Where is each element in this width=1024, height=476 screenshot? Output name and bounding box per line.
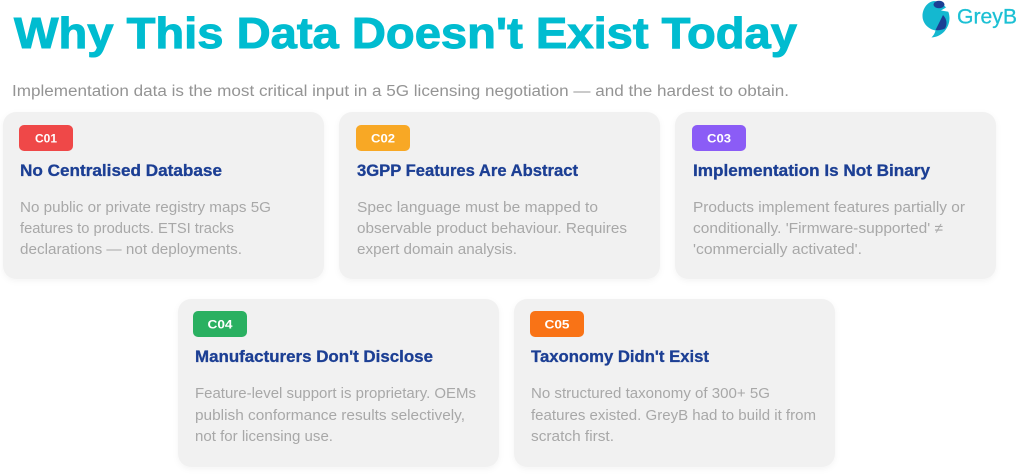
text: C02: Spec language must be mapped to [357,200,598,216]
text: C05: No structured taxonomy of 300+ 5G [531,386,770,402]
badge: C04 [193,311,247,337]
heading: C03: Implementation Is Not Binary [693,162,931,180]
icon: GreyB mark [922,1,950,37]
wordmark: GreyB [957,6,1017,28]
text: C05: scratch first. [531,429,614,445]
text: C01: features to products. ETSI tracks [20,221,234,237]
badge: C02 [356,125,410,151]
text: C03 [693,200,965,258]
text: C04 [195,386,476,445]
badge: C05 [530,311,584,337]
panel: C05 [514,299,835,467]
text: C05 [531,386,816,445]
heading: C05: Taxonomy Didn't Exist [531,348,709,366]
text: C01: No public or private registry maps 5G [20,200,271,216]
text: C04: Feature-level support is proprietary. OEMs [195,386,476,402]
badge: C05: C05 [544,318,570,332]
logo: GreyB [922,1,1017,37]
panel: C04 [178,299,499,467]
title: Why This Data Doesn't Exist Today [14,10,797,58]
panel: C03 [675,112,996,279]
text: C04: publish conformance results selectively, [195,408,465,424]
heading: C04: Manufacturers Don't Disclose [195,348,433,366]
text: C02 [357,200,627,258]
text: C03: Products implement features partially or [693,200,965,216]
text: C04: not for licensing use. [195,429,333,445]
heading: C02: 3GPP Features Are Abstract [357,162,579,180]
badge: C03: C03 [707,132,731,146]
heading: C01: No Centralised Database [20,162,222,180]
badge: C02: C02 [371,132,395,146]
text: C01 [20,200,271,258]
text: C03: 'commercially activated'. [693,242,862,258]
subtitle: Implementation data is the most critical input in a 5G licensing negotiation — and the hardest to obtain. [12,83,789,100]
text: C02: expert domain analysis. [357,242,517,258]
panel: C01 [3,112,324,279]
badge: C04: C04 [208,318,233,332]
badge: C01: C01 [35,132,57,146]
text: C05: features existed. GreyB had to build it from [531,408,816,424]
badge: C03 [692,125,746,151]
badge: C01 [19,125,73,151]
text: C01: declarations — not deployments. [20,242,242,258]
panel: C02 [339,112,660,279]
text: C02: observable product behaviour. Requires [357,221,627,237]
text: C03: conditionally. 'Firmware-supported' ≠ [693,221,943,237]
